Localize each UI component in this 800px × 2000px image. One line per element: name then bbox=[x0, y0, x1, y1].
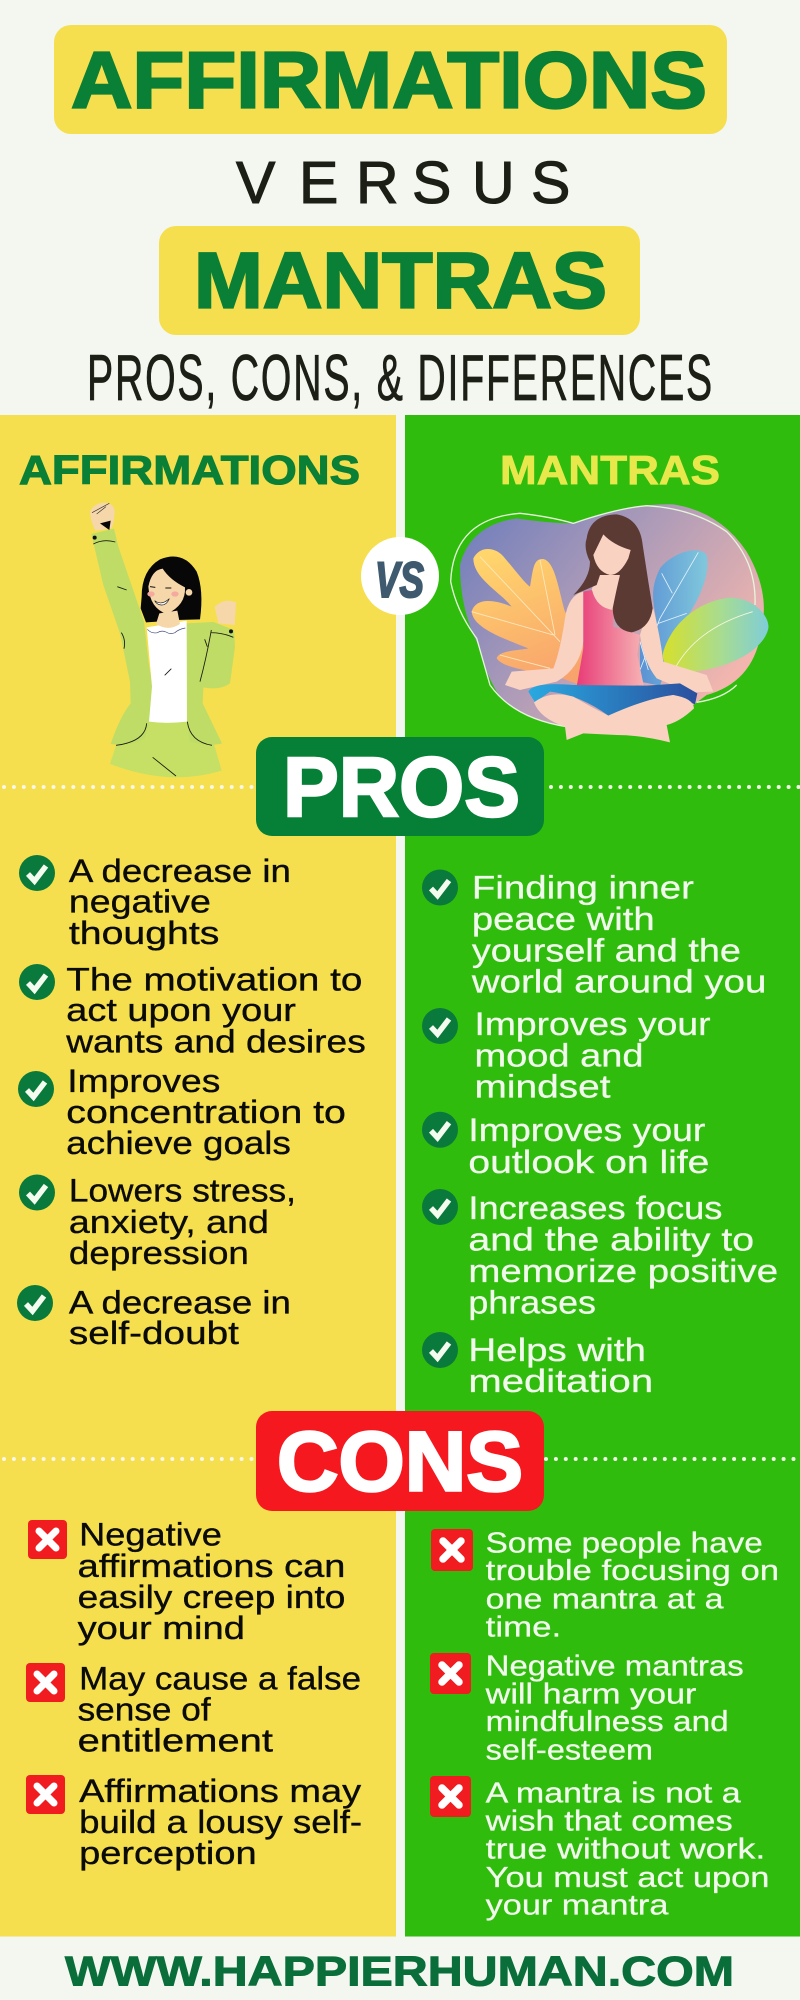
list text: your mantra bbox=[486, 1890, 669, 1922]
list text: trouble focusing on bbox=[486, 1555, 779, 1587]
list: affirmations cons bbox=[26, 1516, 362, 1871]
list text: Helps with bbox=[468, 1332, 646, 1368]
panel: mantras column bbox=[405, 415, 800, 1936]
title: mantras pill: MANTRAS bbox=[194, 236, 607, 324]
list text: Improves your bbox=[474, 1006, 711, 1042]
list text: mood and bbox=[474, 1038, 644, 1074]
list text: Improves your bbox=[468, 1112, 706, 1148]
list: mantras cons bbox=[430, 1527, 779, 1922]
heading: pros: PROS bbox=[283, 740, 520, 834]
list text: peace with bbox=[472, 901, 655, 937]
check icons bbox=[17, 855, 55, 1321]
list text: wants and desires bbox=[65, 1023, 366, 1059]
list text: self-doubt bbox=[69, 1315, 239, 1351]
list text: mindfulness and bbox=[486, 1706, 729, 1738]
footer url: WWW.HAPPIERHUMAN.COM bbox=[65, 1948, 734, 1994]
list text: yourself and the bbox=[472, 932, 741, 968]
list text: A decrease in bbox=[69, 853, 291, 889]
list text bbox=[65, 853, 366, 1351]
list text: achieve goals bbox=[66, 1125, 291, 1161]
list text: easily creep into bbox=[78, 1579, 345, 1615]
x icons bbox=[26, 1520, 67, 1814]
list text: wish that comes bbox=[485, 1806, 733, 1838]
check icons bbox=[422, 870, 458, 1368]
vs badge bbox=[361, 537, 439, 615]
list text: mindset bbox=[474, 1069, 611, 1105]
list text: time. bbox=[486, 1612, 561, 1644]
heading: cons: CONS bbox=[277, 1414, 523, 1508]
title: mantras pill bbox=[159, 226, 640, 335]
list text: affirmations can bbox=[78, 1548, 345, 1584]
list text: your mind bbox=[78, 1610, 245, 1646]
list text: anxiety, and bbox=[69, 1204, 269, 1240]
list text: depression bbox=[69, 1235, 249, 1271]
list text: will harm your bbox=[485, 1678, 697, 1710]
x icons bbox=[430, 1529, 473, 1817]
list text: concentration to bbox=[66, 1094, 346, 1130]
list text: You must act upon bbox=[486, 1862, 769, 1894]
panel: affirmations column bbox=[0, 415, 396, 1936]
title: versus: VERSUS bbox=[236, 150, 570, 216]
list: mantras pros bbox=[422, 870, 778, 1399]
illustration: cheering woman in green suit bbox=[90, 503, 236, 777]
vs badge: VS bbox=[375, 552, 424, 608]
list text: negative bbox=[69, 884, 211, 920]
list text: build a lousy self- bbox=[79, 1804, 362, 1840]
title block bbox=[54, 25, 727, 414]
list text: A mantra is not a bbox=[486, 1778, 742, 1810]
list text: perception bbox=[79, 1835, 257, 1871]
list text bbox=[468, 870, 778, 1399]
illustration: meditating woman with leaves bbox=[451, 504, 768, 742]
column heading: affirmations: AFFIRMATIONS bbox=[19, 447, 360, 493]
list text: and the ability to bbox=[468, 1222, 754, 1258]
list text: entitlement bbox=[78, 1723, 273, 1759]
list text: phrases bbox=[468, 1284, 596, 1320]
list text: memorize positive bbox=[468, 1253, 778, 1289]
list text: true without work. bbox=[486, 1834, 765, 1866]
list text: meditation bbox=[468, 1363, 653, 1399]
list text: world around you bbox=[471, 963, 766, 999]
list text: one mantra at a bbox=[486, 1584, 725, 1616]
list text: sense of bbox=[78, 1692, 211, 1728]
list text: self-esteem bbox=[486, 1735, 653, 1767]
list text: Finding inner bbox=[472, 870, 694, 906]
list text: thoughts bbox=[69, 915, 219, 951]
list text bbox=[78, 1516, 362, 1871]
list text: Increases focus bbox=[468, 1190, 722, 1226]
list text: Some people have bbox=[486, 1527, 763, 1559]
list text: A decrease in bbox=[69, 1284, 291, 1320]
title: affirmations pill: AFFIRMATIONS bbox=[71, 36, 707, 124]
list text: Improves bbox=[67, 1063, 220, 1099]
list text: The motivation to bbox=[66, 961, 362, 997]
column heading: mantras: MANTRAS bbox=[500, 447, 720, 493]
list: affirmations pros bbox=[17, 853, 366, 1351]
list text bbox=[485, 1527, 779, 1922]
cons divider bbox=[4, 1457, 800, 1461]
list text: Negative mantras bbox=[486, 1650, 744, 1682]
list text: Negative bbox=[79, 1516, 222, 1552]
pros divider bbox=[4, 785, 800, 789]
list text: Lowers stress, bbox=[69, 1173, 296, 1209]
list text: act upon your bbox=[66, 992, 296, 1028]
list text: May cause a false bbox=[79, 1661, 361, 1697]
list text: outlook on life bbox=[468, 1144, 709, 1180]
list text: Affirmations may bbox=[79, 1773, 361, 1809]
